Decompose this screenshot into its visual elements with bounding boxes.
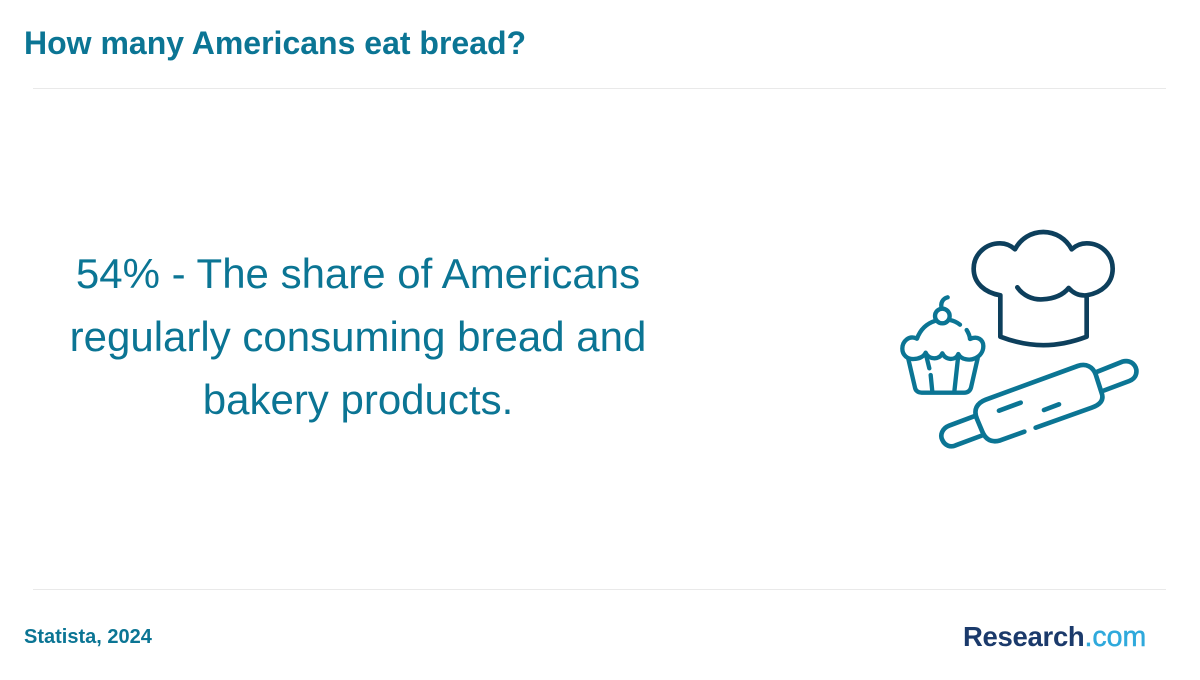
source: Statista, 2024 xyxy=(24,626,152,648)
icon: cupcake xyxy=(902,297,983,393)
statistic text: regularly consuming bread and xyxy=(70,313,646,360)
statistic text xyxy=(70,250,646,423)
icon: chef hat xyxy=(974,232,1113,345)
title: How many Americans eat bread? xyxy=(24,25,526,61)
logo: Research.com xyxy=(963,621,1146,653)
icon: rolling pin xyxy=(941,361,1136,446)
statistic text: 54% - The share of Americans xyxy=(76,250,640,297)
icon: baking illustration xyxy=(900,230,1139,449)
statistic text: bakery products. xyxy=(203,376,513,423)
